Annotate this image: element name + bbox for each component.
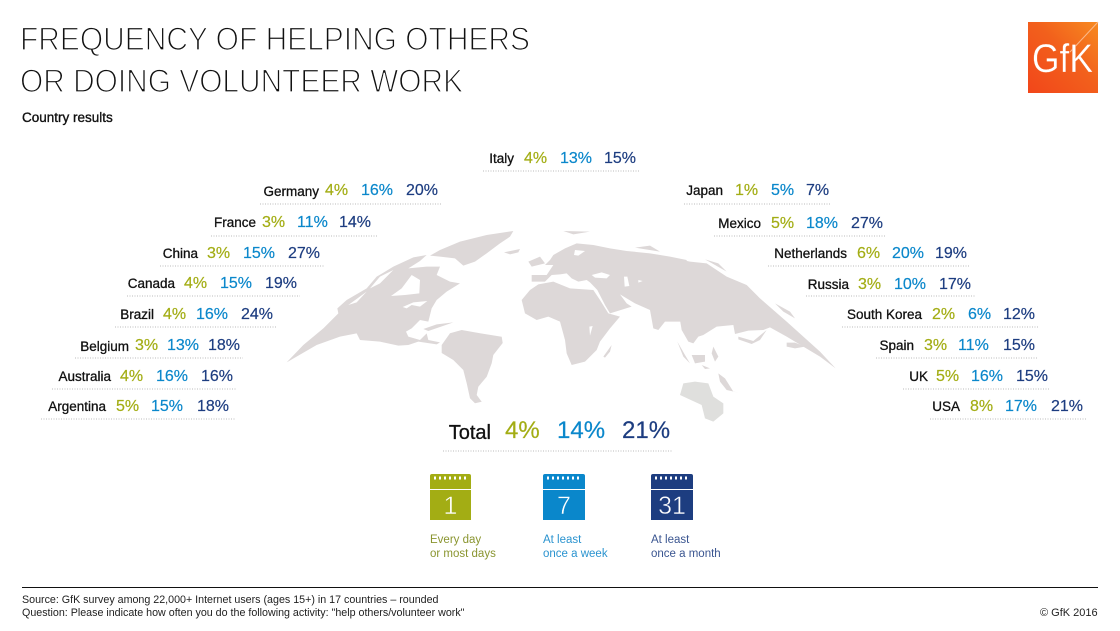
- row: Russia: 10%: [894, 276, 926, 293]
- row: South Korea: 6%: [968, 306, 991, 323]
- copyright: © GfK 2016: [1040, 607, 1098, 619]
- row: Canada: 15%: [220, 275, 252, 292]
- legend: every day: 1: [444, 492, 457, 520]
- row: Total: Total: [449, 422, 491, 444]
- world map: [287, 231, 836, 422]
- row: Australia: 16%: [156, 368, 188, 385]
- row: Brazil: 16%: [196, 306, 228, 323]
- row: France: 14%: [339, 214, 371, 231]
- legend: once a week: 7: [557, 492, 571, 520]
- row: Mexico: Mexico: [718, 216, 761, 231]
- row: Australia: 4%: [120, 368, 143, 385]
- row: Germany: Germany: [263, 184, 319, 199]
- row: Australia: [52, 368, 236, 389]
- row: Spain: Spain: [879, 338, 914, 353]
- legend: every day: Every day: [430, 534, 481, 546]
- row: USA: [930, 398, 1086, 419]
- row: South Korea: 12%: [1003, 306, 1035, 323]
- row: Belgium: Belgium: [80, 339, 129, 354]
- row: Russia: Russia: [808, 277, 849, 292]
- row: Belgium: 13%: [167, 337, 199, 354]
- row: Netherlands: Netherlands: [774, 246, 847, 261]
- row: Australia: Australia: [58, 369, 111, 384]
- footer rule: [22, 586, 1098, 588]
- row: UK: 5%: [936, 368, 959, 385]
- legend: once a month: 31: [658, 492, 686, 520]
- legend: once a week: At least: [543, 534, 582, 546]
- row: Mexico: 27%: [851, 215, 883, 232]
- Americas and arctic: [287, 231, 520, 362]
- row: China: 15%: [243, 245, 275, 262]
- row: Belgium: 3%: [135, 337, 158, 354]
- GfK logo: [1028, 22, 1098, 93]
- row: Italy: 15%: [604, 150, 636, 167]
- row: Total: [443, 417, 672, 451]
- row: Spain: 11%: [958, 337, 989, 354]
- legend: once a week: once a week: [543, 548, 608, 560]
- row: UK: [903, 368, 1050, 389]
- row: France: France: [214, 215, 256, 230]
- row: Russia: 17%: [939, 276, 971, 293]
- GfK logo: GfK: [1032, 37, 1093, 81]
- row: Canada: Canada: [128, 276, 175, 291]
- row: Canada: 4%: [184, 275, 207, 292]
- row: Japan: 1%: [735, 182, 758, 199]
- row: Germany: 4%: [325, 182, 348, 199]
- title: OR DOING VOLUNTEER WORK: [20, 63, 463, 99]
- row: Spain: 3%: [924, 337, 947, 354]
- row: China: [160, 245, 325, 266]
- subtitle: country results: Country results: [22, 110, 113, 125]
- legend: once a week: [543, 474, 608, 560]
- row: China: 27%: [288, 245, 320, 262]
- row: Japan: [684, 182, 830, 204]
- row: France: [211, 214, 377, 236]
- Africa, Europe and western Asia: [522, 231, 687, 365]
- row: USA: 17%: [1005, 398, 1037, 415]
- row: Mexico: 5%: [771, 215, 794, 232]
- South America: [442, 330, 503, 403]
- title: FREQUENCY OF HELPING OTHERS: [20, 21, 530, 57]
- row: China: 3%: [207, 245, 230, 262]
- row: USA: 8%: [970, 398, 993, 415]
- row: USA: USA: [932, 399, 960, 414]
- row: Japan: Japan: [686, 183, 723, 198]
- row: South Korea: 2%: [932, 306, 955, 323]
- row: Argentina: 18%: [197, 398, 229, 415]
- source note: Question: Please indicate how often you do the following activity: "help others/volunteer work": [22, 607, 465, 619]
- row: China: China: [163, 246, 198, 261]
- legend: every day: [430, 474, 496, 560]
- row: UK: UK: [909, 369, 928, 384]
- legend: every day: or most days: [430, 548, 496, 560]
- row: Netherlands: 6%: [857, 245, 880, 262]
- source note: [22, 594, 465, 619]
- row: UK: 15%: [1016, 368, 1048, 385]
- row: Italy: 4%: [524, 150, 547, 167]
- row: Netherlands: [768, 245, 970, 266]
- row: Netherlands: 20%: [892, 245, 924, 262]
- row: Netherlands: 19%: [935, 245, 967, 262]
- row: France: 11%: [297, 214, 328, 231]
- row: Argentina: [41, 398, 235, 419]
- row: USA: 21%: [1051, 398, 1083, 415]
- row: Belgium: 18%: [208, 337, 240, 354]
- row: Germany: 20%: [406, 182, 438, 199]
- row: Brazil: [115, 306, 277, 327]
- row: UK: 16%: [971, 368, 1003, 385]
- row: Italy: [483, 150, 640, 171]
- row: Australia: 16%: [201, 368, 233, 385]
- row: Canada: [127, 275, 300, 296]
- row: Mexico: 18%: [806, 215, 838, 232]
- row: South Korea: South Korea: [847, 307, 922, 322]
- row: Belgium: [75, 337, 243, 358]
- title: [20, 21, 530, 99]
- row: Japan: 7%: [806, 182, 829, 199]
- row: Brazil: Brazil: [120, 307, 154, 322]
- row: Canada: 19%: [265, 275, 297, 292]
- row: Germany: [260, 182, 441, 204]
- row: Total: 14%: [557, 417, 605, 444]
- row: Total: 4%: [505, 417, 540, 444]
- row: Italy: 13%: [560, 150, 592, 167]
- row: Total: 21%: [622, 417, 670, 444]
- row: Argentina: 5%: [116, 398, 139, 415]
- row: Brazil: 4%: [163, 306, 186, 323]
- row: Spain: [876, 337, 1038, 358]
- row: Mexico: [714, 215, 886, 236]
- row: Argentina: 15%: [151, 398, 183, 415]
- row: Russia: [806, 276, 975, 296]
- row: Brazil: 24%: [241, 306, 273, 323]
- row: Italy: Italy: [489, 151, 514, 166]
- legend: once a month: [651, 474, 721, 560]
- legend: once a month: once a month: [651, 548, 721, 560]
- row: Japan: 5%: [771, 182, 794, 199]
- eastern Asia, islands and Australia: [670, 257, 836, 422]
- legend: once a month: At least: [651, 534, 690, 546]
- source note: Source: GfK survey among 22,000+ Internet users (ages 15+) in 17 countries – rounded: [22, 594, 439, 606]
- row: Spain: 15%: [1003, 337, 1035, 354]
- row: South Korea: [842, 306, 1038, 327]
- row: Russia: 3%: [858, 276, 881, 293]
- row: Argentina: Argentina: [48, 399, 106, 414]
- row: France: 3%: [262, 214, 285, 231]
- row: Germany: 16%: [361, 182, 393, 199]
